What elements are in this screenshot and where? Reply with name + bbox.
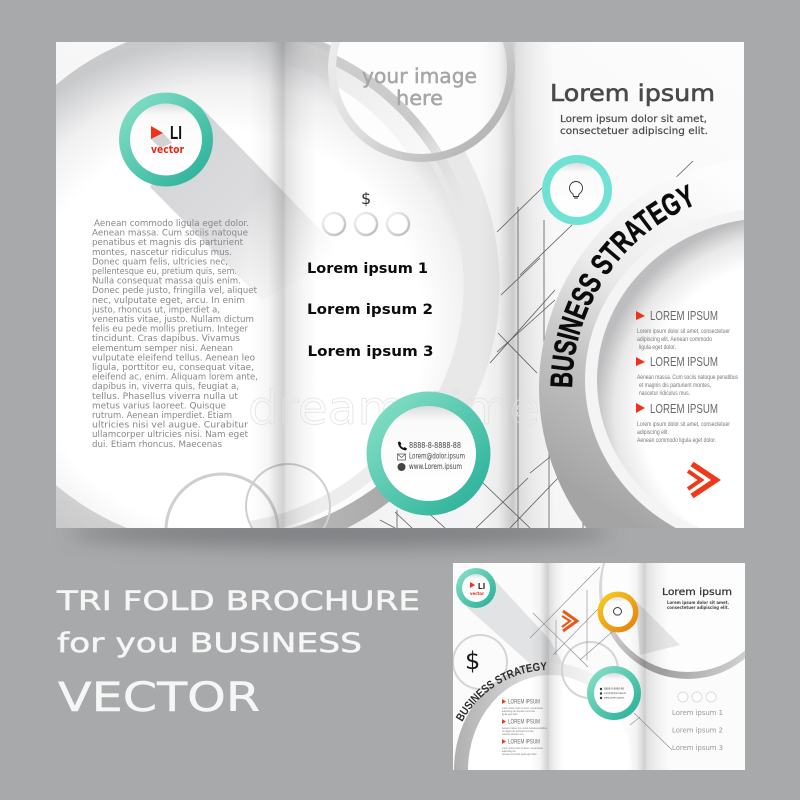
caption line three: VECTOR bbox=[58, 675, 260, 721]
thumbnail curved title: BUSINESS STRATEGY bbox=[456, 662, 546, 722]
bullet one: adipiscing elit. Aenean commodo bbox=[637, 337, 713, 343]
image placeholder text: your image bbox=[362, 64, 477, 88]
decorative circles, bottom left bbox=[164, 463, 331, 528]
thumbnail brochure bbox=[453, 563, 745, 770]
right panel grey ring bbox=[539, 176, 678, 528]
thumbnail outline circles bbox=[453, 635, 618, 698]
bullet two: et magnis dis parturient montes, bbox=[639, 383, 711, 389]
thumbnail list: Aenean massa. Cum sociis natoque penatibus bbox=[502, 726, 547, 730]
body paragraph: penatibus et magnis dis parturient bbox=[92, 238, 244, 248]
body paragraph: dapibus in, viverra quis, feugiat a, bbox=[92, 382, 239, 392]
thumbnail long shadow bbox=[462, 580, 562, 665]
panel: large white disc bbox=[56, 42, 462, 528]
body paragraph: eleifend ac, enim. Aliquam lorem ante, bbox=[92, 373, 258, 383]
body paragraph: nec, vulputate eget, arcu. In enim bbox=[92, 296, 245, 306]
panel: left text bbox=[91, 92, 258, 450]
body paragraph: elementum semper nisi. Aenean bbox=[92, 344, 233, 354]
thumbnail lorem items bbox=[672, 709, 723, 752]
brochure drop shadow bbox=[70, 517, 610, 547]
bullet one: ligula eget dolor. bbox=[639, 345, 676, 351]
list of lorem items: Lorem ipsum 3 bbox=[308, 344, 434, 360]
light curved band, right side bbox=[427, 127, 482, 425]
body paragraph: metus varius laoreet. Quisque bbox=[92, 401, 226, 411]
thumbnail buttons bbox=[678, 692, 716, 702]
list of lorem items bbox=[307, 261, 434, 360]
panel: middle bbox=[307, 64, 490, 516]
thumbnail dollar icon: $ bbox=[465, 647, 480, 675]
contact details: www.Lorem.ipsum bbox=[409, 462, 462, 471]
watermark: dreamstime bbox=[248, 381, 540, 435]
main brochure bbox=[56, 42, 744, 528]
thumbnail list: LOREM IPSUM bbox=[508, 700, 540, 706]
curved title: BUSINESS STRATEGY bbox=[550, 184, 692, 387]
bullet three bbox=[636, 401, 730, 444]
thumbnail contact circle: Lorem@dolor.ipsum bbox=[604, 691, 626, 695]
caption line one: TRI FOLD BROCHURE bbox=[56, 586, 420, 617]
image placeholder text: here bbox=[396, 86, 443, 110]
bullet two bbox=[636, 354, 738, 397]
thumbnail paper bbox=[453, 563, 745, 770]
grey curved stripe, upper bbox=[336, 56, 448, 168]
thumbnail list: ligula eget dolor. bbox=[502, 712, 518, 716]
thumbnail lorem items: Lorem ipsum 1 bbox=[672, 709, 723, 717]
body paragraph: Aenean commodo ligula eget dolor. bbox=[94, 219, 249, 229]
brochure paper bbox=[56, 42, 744, 528]
globe icon bbox=[398, 463, 406, 471]
thumbnail left ring bbox=[454, 664, 588, 770]
grey curved band, lower bbox=[292, 486, 390, 528]
body paragraph: Donec quam felis, ultricies nec, bbox=[92, 257, 228, 267]
bullet three: Lorem ipsum dolor sit amet, consectetuer bbox=[637, 422, 730, 428]
bullet one: Lorem ipsum dolor sit amet, consectetuer bbox=[637, 329, 730, 335]
body paragraph bbox=[91, 219, 258, 450]
thumbnail contact circle bbox=[587, 666, 641, 720]
thumbnail list: Lorem ipsum dolor sit amet, consectetuer bbox=[502, 746, 543, 750]
dollar icon: $ bbox=[361, 189, 371, 208]
image placeholder interior bbox=[336, 49, 460, 154]
fold highlight right bbox=[517, 42, 540, 528]
body paragraph: Aenean massa. Cum sociis natoque bbox=[92, 229, 248, 239]
thumbnail list: nascetur ridiculus mus. bbox=[502, 732, 524, 736]
image placeholder text bbox=[362, 64, 477, 110]
thumbnail right band bbox=[599, 563, 745, 679]
bullet three: LOREM IPSUM bbox=[650, 401, 718, 416]
thumbnail logo bbox=[456, 568, 496, 608]
thumbnail construction lines bbox=[530, 567, 672, 750]
thumbnail contact circle: www.Lorem.ipsum bbox=[604, 696, 624, 700]
thumbnail list: LOREM IPSUM bbox=[508, 720, 540, 726]
thumbnail right disc bbox=[602, 563, 745, 672]
thumbnail lorem items: Lorem ipsum 2 bbox=[672, 726, 723, 734]
right subheading bbox=[560, 114, 708, 137]
icon: bulb bbox=[570, 182, 582, 198]
light curved band, lower bbox=[250, 466, 372, 528]
body paragraph: justo, rhoncus ut, imperdiet a, bbox=[91, 305, 220, 315]
contact details: 8888-8-8888-88 bbox=[409, 441, 461, 450]
fold shadow right bbox=[496, 42, 517, 528]
bullet one bbox=[636, 308, 730, 351]
contact details: Lorem@dolor.ipsum bbox=[409, 452, 465, 460]
logo circle bbox=[119, 92, 213, 186]
fold shadow left bbox=[266, 42, 287, 528]
contact circle bbox=[366, 392, 490, 516]
right panel inner disc bbox=[597, 220, 744, 528]
logo word: vector bbox=[151, 144, 185, 156]
body paragraph: pellentesque eu, pretium quis, sem. bbox=[92, 267, 237, 277]
logo triangle shadow bbox=[151, 133, 172, 148]
thumbnail list bbox=[502, 699, 547, 756]
fold highlight left bbox=[287, 42, 305, 528]
logo letters: LI bbox=[170, 123, 182, 143]
right subheading: consectetuer adipiscing elit. bbox=[560, 126, 708, 137]
caption line two: for you BUSINESS bbox=[57, 628, 362, 659]
list of lorem items: Lorem ipsum 1 bbox=[307, 261, 428, 277]
right subheading: Lorem ipsum dolor sit amet, bbox=[560, 114, 707, 125]
thumbnail contact circle: 8888-8-8888-88 bbox=[604, 686, 624, 690]
body paragraph: ullamcorper ultricies nisi. Nam eget bbox=[92, 430, 249, 440]
body paragraph: tellus. Phasellus viverra nulla ut bbox=[92, 392, 239, 402]
body paragraph: Nulla consequat massa quis enim. bbox=[92, 277, 241, 287]
bullet one: LOREM IPSUM bbox=[650, 308, 718, 323]
bullet two: nascetur ridiculus mus. bbox=[639, 391, 690, 397]
body paragraph: rutrum. Aenean imperdiet. Etiam bbox=[92, 411, 232, 421]
contact details bbox=[409, 441, 465, 471]
image placeholder ring bbox=[328, 42, 515, 162]
thumbnail soft wedge bbox=[635, 600, 680, 655]
list of lorem items: Lorem ipsum 2 bbox=[307, 302, 433, 318]
body paragraph: ligula, porttitor eu, consequat vitae, bbox=[92, 363, 254, 373]
caption bbox=[56, 586, 420, 721]
panel: right bbox=[542, 81, 738, 498]
bullet two: LOREM IPSUM bbox=[650, 354, 718, 369]
body paragraph: felis eu pede mollis pretium. Integer bbox=[92, 325, 248, 335]
thumbnail subheading: consectetuer adipiscing elit. bbox=[667, 605, 729, 610]
thumbnail heading: Lorem ipsum bbox=[662, 587, 732, 598]
thumbnail lorem items: Lorem ipsum 3 bbox=[672, 744, 723, 752]
bullet three: adipiscing elit. bbox=[637, 430, 669, 436]
thumbnail yellow circle bbox=[598, 592, 638, 632]
body paragraph: venenatis vitae, justo. Nullam dictum bbox=[92, 315, 254, 325]
thumbnail list: Aenean commodo ligula eget dolor. bbox=[502, 752, 537, 756]
thumbnail logo: vector bbox=[470, 591, 485, 597]
thumbnail logo: LI bbox=[478, 582, 485, 591]
body paragraph: vulputate eleifend tellus. Aenean leo bbox=[92, 353, 255, 363]
bullet three: Aenean commodo ligula eget dolor. bbox=[637, 438, 716, 444]
right heading: Lorem ipsum bbox=[550, 81, 715, 107]
thumbnail chevrons bbox=[562, 611, 577, 631]
long shadow behind logo bbox=[150, 106, 320, 292]
body paragraph: ultricies nisi vel augue. Curabitur bbox=[92, 421, 248, 431]
thumbnail subheading: Lorem ipsum dolor sit amet, bbox=[667, 600, 729, 605]
envelope icon bbox=[398, 454, 406, 460]
body paragraph: tincidunt. Cras dapibus. Vivamus bbox=[92, 334, 240, 344]
thumbnail list: et magnis dis parturient montes, bbox=[502, 729, 534, 733]
body paragraph: dui. Etiam rhoncus. Maecenas bbox=[92, 440, 222, 450]
thumbnail list: LOREM IPSUM bbox=[508, 740, 540, 746]
three small buttons bbox=[323, 213, 409, 235]
icon: red chevrons bbox=[688, 464, 716, 496]
body paragraph: montes, nascetur ridiculus mus. bbox=[92, 248, 232, 258]
bullet two: Aenean massa. Cum sociis natoque penatibus bbox=[637, 375, 738, 381]
thumbnail fold shadows bbox=[538, 563, 660, 770]
soft shading under upper stripe bbox=[336, 66, 406, 134]
thin construction lines bbox=[380, 161, 693, 528]
right panel white band bbox=[585, 272, 700, 528]
thumbnail left disc bbox=[468, 675, 598, 770]
thumbnail subheading bbox=[667, 600, 729, 610]
body paragraph: Donec pede justo, fringilla vel, aliquet bbox=[92, 286, 258, 296]
phone icon bbox=[398, 442, 407, 450]
thumbnail list: Lorem ipsum dolor sit amet, consectetuer bbox=[502, 706, 543, 710]
logo triangle bbox=[151, 126, 163, 139]
thumbnail list: adipiscing elit. Aenean commodo bbox=[502, 709, 535, 713]
bulb circle bbox=[542, 155, 612, 225]
thumbnail list: adipiscing elit. bbox=[502, 749, 516, 753]
